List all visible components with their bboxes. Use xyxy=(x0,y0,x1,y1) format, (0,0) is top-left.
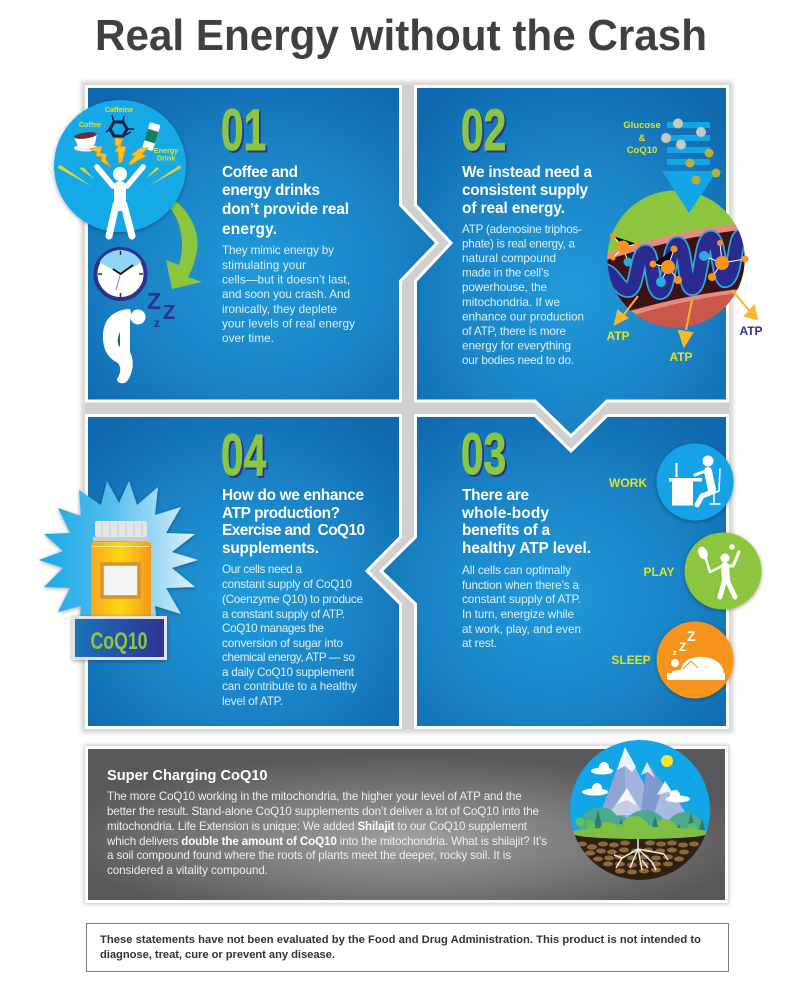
body 01: They mimic energy by xyxy=(222,244,334,257)
body 04: Our cells need a xyxy=(222,563,302,576)
panel body: The more CoQ10 working in the mitochondria, the higher your level of ATP and the xyxy=(107,790,522,803)
body 03: In turn, energize while xyxy=(462,608,574,621)
person xyxy=(97,167,143,236)
body 02: ATP (adenosine triphos- xyxy=(462,223,582,236)
body 03: All cells can optimally xyxy=(462,564,571,577)
body 04: can contribute to a healthy xyxy=(222,680,357,693)
heading 01: Coffee and xyxy=(222,164,298,181)
heading 03: whole-body xyxy=(461,505,549,522)
panel: step 01 xyxy=(86,86,437,401)
panel: step 04 xyxy=(86,416,400,728)
body 02: enhance our production xyxy=(462,310,584,324)
body 02: our bodies need to do. xyxy=(462,354,574,367)
bottle body xyxy=(91,542,151,622)
clouds xyxy=(582,762,690,802)
lightning bolts xyxy=(90,138,148,167)
body 04: constant supply of CoQ10 xyxy=(222,578,352,591)
icon: sleep Z letters: z xyxy=(154,316,160,330)
panel body: a soil compound found where the roots of plants meet the deeper, rocky soil. It is xyxy=(107,849,511,862)
molecules xyxy=(613,236,745,282)
body 04 xyxy=(222,563,363,708)
panel body: better the result. Stand-alone CoQ10 supplements don’t deliver a lot of CoQ10 into the xyxy=(107,805,539,818)
title: Real Energy without the Crash xyxy=(95,11,707,60)
body 01: and soon you crash. And xyxy=(222,288,350,301)
heading 03 xyxy=(461,487,591,557)
coffee label: Coffee xyxy=(79,120,101,129)
coffee cup xyxy=(74,131,98,152)
step number 03: 03 xyxy=(461,422,506,487)
body 03 xyxy=(462,564,581,650)
disclaimer box: diagnose, treat, cure or prevent any disease. xyxy=(100,949,335,961)
icon: clock xyxy=(96,249,146,299)
heading 03: There are xyxy=(462,487,529,504)
stones xyxy=(577,840,699,874)
step number 03: 03 xyxy=(463,424,508,489)
sun xyxy=(661,755,673,767)
body 01: over time. xyxy=(222,332,274,345)
hills xyxy=(580,807,704,830)
CoQ10 tag xyxy=(74,618,166,658)
energy drink label: Energy xyxy=(154,146,178,155)
icon: CoQ10 bottle with starburst xyxy=(39,481,198,658)
icon: mountain and roots circle xyxy=(565,740,715,884)
step number 01: 01 xyxy=(223,100,268,165)
body 04: a constant supply of ATP. xyxy=(222,608,345,621)
body 04: (Coenzyme Q10) to produce xyxy=(222,593,363,606)
step number 04: 04 xyxy=(223,425,268,490)
panel body: which delivers double the amount of CoQ10 into the mitochondria. What is shilajit? It’s xyxy=(106,835,547,848)
body 02: energy for everything xyxy=(462,340,571,352)
body 01: your levels of real energy xyxy=(222,318,355,330)
body 03: constant supply of ATP. xyxy=(462,593,581,606)
icon: sleep circle: Z xyxy=(679,640,686,654)
panel shadows and gutters xyxy=(81,81,733,733)
body 04: chemical energy, ATP — so xyxy=(222,651,355,664)
panel heading: Super Charging CoQ10 xyxy=(107,768,268,784)
step number 04: 04 xyxy=(221,423,266,488)
disclaimer box: These statements have not been evaluated by the Food and Drug Administration. This product is not intended to xyxy=(100,934,701,946)
icon: green curved arrow xyxy=(166,197,202,289)
panel body xyxy=(106,790,547,877)
body 03: at work, play, and even xyxy=(462,623,581,636)
body 01: stimulating your xyxy=(222,259,306,272)
bottle label xyxy=(102,564,139,597)
ATP labels: ATP xyxy=(606,329,630,343)
energy drink can xyxy=(142,122,161,151)
panel body: considered a vitality compound. xyxy=(107,864,268,877)
label: sleep: SLEEP xyxy=(611,653,651,667)
glucose label: & xyxy=(639,133,646,144)
icon: sleep circle: z xyxy=(673,650,677,657)
icon: sleep Z letters: Z xyxy=(147,288,161,314)
blue funnel bars xyxy=(662,122,717,213)
icon: mitochondrion: ATP xyxy=(739,324,763,338)
icon: tired person xyxy=(103,309,146,383)
body 02: mitochondria. If we xyxy=(462,296,560,309)
icon: sleep Z letters xyxy=(147,288,175,330)
disclaimer box xyxy=(86,924,728,972)
heading 02: consistent supply xyxy=(462,182,588,199)
step number 02: 02 xyxy=(463,100,508,165)
body 01 xyxy=(222,244,355,345)
body 02 xyxy=(462,223,584,367)
heading 04 xyxy=(222,487,365,557)
heading 01 xyxy=(222,164,349,238)
icon: sleep circle xyxy=(656,622,734,698)
icon: sleep circle: Z xyxy=(687,628,696,644)
body 04: conversion of sugar into xyxy=(222,637,343,650)
body 02: powerhouse, the xyxy=(462,281,547,294)
heading 04: ATP production? xyxy=(222,505,340,522)
glucose label: CoQ10 xyxy=(627,145,657,156)
step number 02: 02 xyxy=(461,98,506,163)
body 03: function when there’s a xyxy=(462,579,579,592)
trees xyxy=(594,810,705,830)
mountains xyxy=(602,747,644,817)
heading 01: don’t provide real xyxy=(222,201,349,218)
bottle cap xyxy=(93,521,149,541)
body 02: phate) is real energy, a xyxy=(462,238,575,250)
body 02: of ATP, there is more xyxy=(462,325,566,338)
step number 01: 01 xyxy=(221,98,266,163)
icon: mitochondrion xyxy=(600,118,763,364)
body 03: at rest. xyxy=(462,637,497,650)
icon: energized person circle xyxy=(54,100,186,236)
heading 02 xyxy=(462,164,592,217)
heading 02: of real energy. xyxy=(462,200,565,217)
glucose label: Glucose xyxy=(623,120,661,131)
heading 04: supplements. xyxy=(222,540,319,557)
ATP arrows xyxy=(615,290,757,346)
panel: step 02 xyxy=(416,86,728,436)
caffeine molecule xyxy=(106,115,134,136)
body 02: natural compound xyxy=(462,252,556,265)
icon: play circle xyxy=(684,532,762,610)
panel: super charging CoQ10 xyxy=(84,745,729,904)
caffeine label: Caffeine xyxy=(105,105,133,114)
icon: mitochondrion: ATP xyxy=(669,350,693,364)
label: play: PLAY xyxy=(644,565,674,579)
body 01: cells—but it doesn’t last, xyxy=(222,274,350,286)
heading 01: energy. xyxy=(222,221,277,238)
heading 03: benefits of a xyxy=(462,522,550,539)
glucose and CoQ10 particles xyxy=(661,118,706,150)
heading 04: How do we enhance xyxy=(222,487,364,504)
body 01: ironically, they deplete xyxy=(222,303,337,316)
body 04: CoQ10 manages the xyxy=(222,622,324,635)
soil xyxy=(574,834,706,880)
body 04: a daily CoQ10 supplement xyxy=(222,666,355,679)
body 02: made in the cell’s xyxy=(462,266,549,280)
roots xyxy=(614,839,668,870)
label: work: WORK xyxy=(609,476,647,490)
heading 04: Exercise and CoQ10 xyxy=(222,522,365,539)
CoQ10 tag: CoQ10 xyxy=(90,628,148,655)
energy drink label: Drink xyxy=(157,154,175,162)
panel: step 03 xyxy=(381,416,728,728)
icon: work circle xyxy=(656,444,734,520)
heading 01: energy drinks xyxy=(222,182,320,199)
panel body: mitochondria. Life Extension is unique: We added Shilajit to our CoQ10 supplement xyxy=(107,820,528,833)
heading 03: healthy ATP level. xyxy=(462,540,591,557)
icon: sleep Z letters: Z xyxy=(163,302,175,324)
body 04: level of ATP. xyxy=(222,695,283,708)
heading 02: We instead need a xyxy=(462,164,592,181)
energy rays xyxy=(58,165,181,186)
